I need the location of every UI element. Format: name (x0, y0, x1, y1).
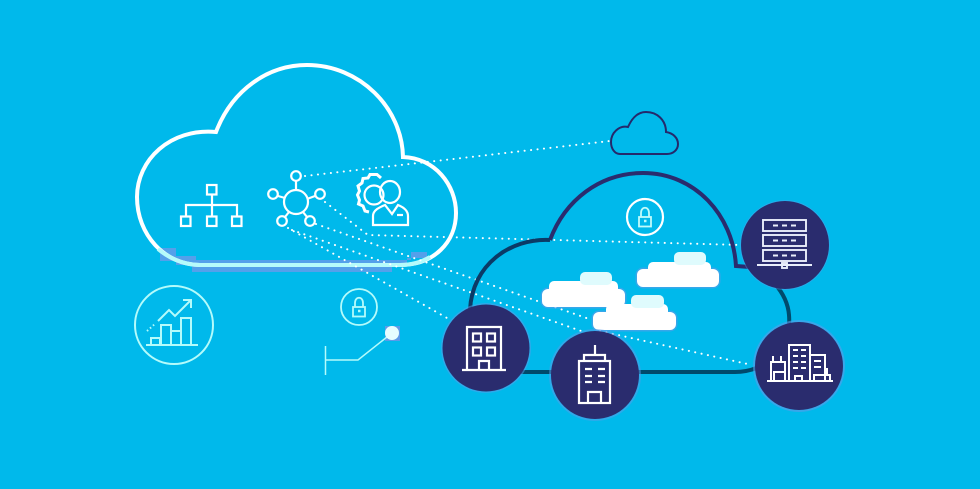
cloud bottom (593, 295, 676, 330)
icon: people with gear (358, 174, 408, 225)
large navy cloud outline (470, 173, 789, 372)
large white cloud (137, 65, 456, 272)
small navy cloud icon (611, 112, 678, 154)
white clouds (542, 252, 719, 330)
building circle two (549, 329, 641, 421)
icon: network hub (268, 171, 325, 226)
server circle (740, 200, 830, 290)
icon: org chart (181, 185, 242, 226)
connector node with ball (325, 326, 400, 375)
dotted connector lines (288, 141, 752, 365)
icon: lock in circle, left (341, 289, 377, 325)
city circle (753, 320, 845, 412)
building circle one (441, 303, 531, 393)
cloud left (542, 272, 625, 307)
icon: lock in circle, right (627, 199, 663, 235)
cloud right (637, 252, 719, 287)
icon: growth chart in circle (135, 286, 213, 364)
